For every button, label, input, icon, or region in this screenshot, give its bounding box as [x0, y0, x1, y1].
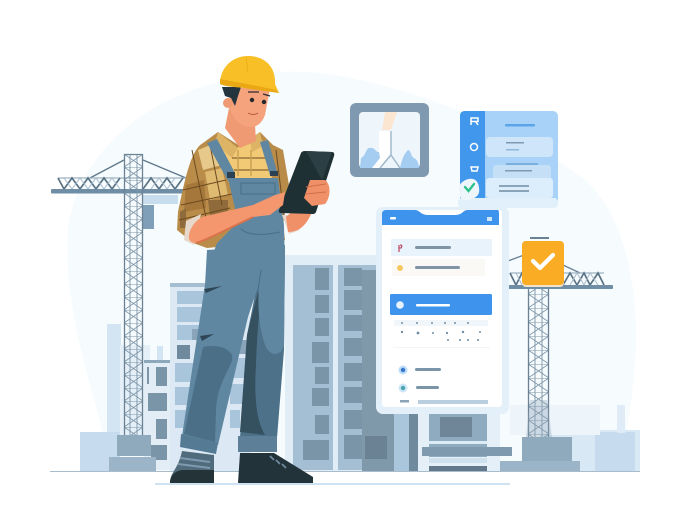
building: tall left	[170, 283, 250, 471]
icon: yellow check badge	[522, 241, 564, 287]
right forearm	[286, 208, 312, 232]
row 1	[391, 239, 492, 256]
left leg and hips	[182, 245, 285, 445]
trouser wrinkles	[200, 286, 222, 341]
phone header	[382, 210, 499, 225]
right leg	[240, 255, 285, 438]
background skyline	[80, 324, 640, 471]
cuffs	[184, 214, 201, 245]
hard hat	[220, 56, 279, 93]
left shoe	[170, 451, 214, 483]
background blob	[67, 72, 636, 471]
overalls pockets	[241, 183, 280, 234]
building: short left	[144, 346, 172, 470]
list row 1	[398, 366, 441, 374]
head	[229, 88, 270, 127]
panel: side menu card	[458, 111, 558, 208]
overalls straps	[207, 139, 235, 181]
right shoe	[238, 453, 313, 483]
tablet	[279, 151, 334, 214]
row 2	[392, 259, 485, 276]
ground lines	[50, 471, 640, 485]
crane: right	[500, 238, 613, 471]
icon: green check badge	[459, 179, 479, 200]
icon grid	[394, 320, 488, 341]
building: tall centre	[285, 255, 420, 471]
building: lower right	[418, 412, 512, 471]
blue banner	[390, 294, 492, 315]
neck	[225, 108, 258, 148]
panel: phone	[376, 207, 509, 414]
menu icon 3	[471, 167, 478, 171]
hair	[222, 87, 241, 106]
list row 2	[398, 384, 439, 392]
shirt plaid	[179, 132, 284, 228]
panel: framed picture	[350, 103, 429, 177]
worker	[170, 56, 334, 483]
menu icon 2	[470, 144, 478, 150]
shirt base	[177, 132, 289, 248]
hand on tablet	[304, 180, 330, 206]
overalls bib	[207, 178, 285, 270]
crane: left	[51, 154, 186, 471]
menu icon 1	[471, 118, 478, 125]
front forearm and hand	[189, 192, 285, 243]
